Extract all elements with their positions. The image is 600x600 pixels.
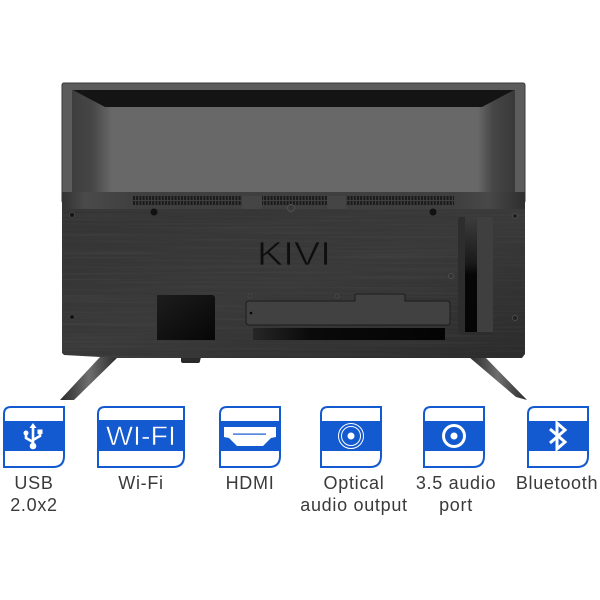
icon: HDMI (219, 406, 281, 468)
label: USB: USB (14, 473, 54, 493)
black square cover (157, 295, 215, 340)
lower slot (253, 328, 445, 340)
label: Optical audio output (300, 473, 408, 515)
port cover plate (246, 294, 450, 325)
label: Optical audio output: audio output (300, 494, 408, 514)
icon: Wi-Fi (97, 406, 185, 468)
TV back view (60, 82, 527, 400)
icon: optical audio (320, 406, 382, 468)
mounting screws (70, 204, 518, 320)
icon: Wi-Fi: WI-FI (106, 421, 176, 451)
label: Optical audio output: Optical (324, 473, 384, 493)
label: 3.5 audio port: 3.5 audio (416, 473, 496, 493)
label: 3.5 audio port: port (439, 494, 473, 514)
icon: 3.5 audio (423, 406, 485, 468)
TV outer frame (62, 83, 525, 203)
label: HDMI: HDMI (226, 473, 274, 493)
plate screw (250, 312, 252, 314)
label: USB: 2.0x2 (10, 494, 58, 514)
icon: USB (3, 406, 65, 468)
recess walls and floor (72, 90, 515, 193)
center foot (181, 357, 201, 363)
stand leg left (60, 357, 118, 400)
icon: Bluetooth (527, 406, 589, 468)
label: USB (10, 473, 58, 514)
KIVI logo: KIVI (257, 235, 331, 272)
brushed back panel (62, 209, 525, 358)
vent strip (62, 192, 525, 210)
side port bay (458, 217, 493, 335)
label: 3.5 audio port (416, 473, 496, 515)
stand leg right (469, 357, 527, 400)
label: Wi-Fi: Wi-Fi (118, 473, 164, 493)
label: Bluetooth: Bluetooth (516, 473, 598, 493)
